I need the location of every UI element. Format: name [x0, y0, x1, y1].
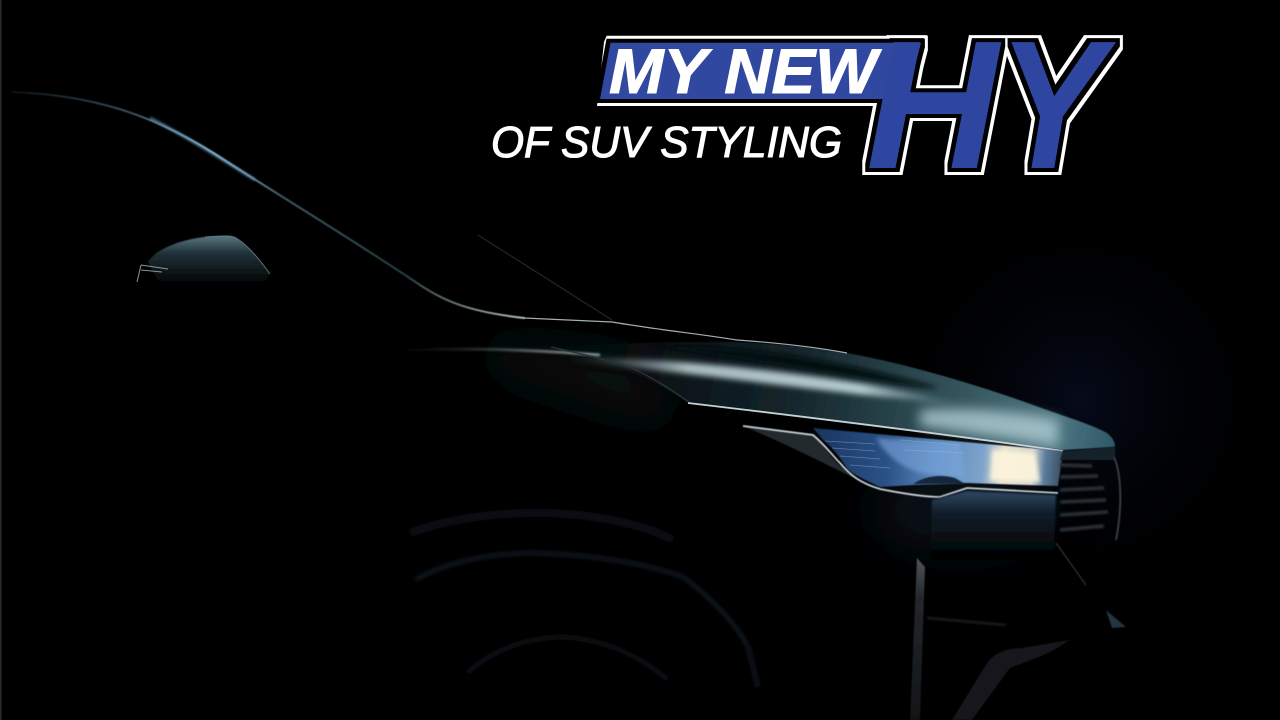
background glow: [880, 200, 1280, 600]
lamp lens: [813, 428, 1063, 487]
wheel arch lower arc: [415, 553, 758, 687]
grille slats: [1060, 465, 1108, 530]
wiper line: [478, 235, 612, 320]
hood front glare: [920, 409, 1058, 446]
grille: [1056, 457, 1120, 585]
car silhouette: [12, 92, 1126, 720]
lamp dark lens curve: [913, 476, 965, 484]
soft roof highlight: [150, 118, 255, 180]
lit area beneath headlight: [870, 465, 1050, 555]
hood surface: [555, 342, 1115, 450]
lower bumper intake: [952, 640, 1069, 720]
body crease highlight: [392, 349, 600, 355]
hood top dark band: [640, 345, 940, 388]
lamp side panel: [743, 426, 855, 478]
grille right frame: [1114, 457, 1120, 540]
lamp chrome sweep: [743, 426, 1058, 497]
logo letter Y: Y: [998, 4, 1117, 207]
left edge strip: [0, 0, 2, 720]
hood edge line: [524, 318, 847, 353]
grille lower edge: [1056, 543, 1086, 585]
logo: My New HY of SUV styling: [491, 2, 1117, 207]
fender shadow edge: [1060, 447, 1115, 460]
lamp scanlines: [825, 440, 965, 468]
car body shading: [470, 343, 690, 420]
mirror housing: [148, 236, 270, 288]
logo letter H: H: [866, 2, 1002, 207]
lamp upper trim: [688, 403, 1063, 451]
logo words MY NEW: MY NEW: [609, 37, 882, 107]
bumper corner highlight: [1106, 610, 1126, 628]
mirror indicator edge: [137, 265, 168, 282]
logo outlined shape: [600, 2, 1117, 207]
lamp inner light patch: [876, 438, 965, 478]
mirror rim light: [205, 236, 270, 274]
wheel arch upper arc: [410, 513, 673, 540]
mask: open left end of banner: [580, 30, 609, 106]
front bumper panel: [930, 491, 1056, 560]
lamp hot spot: [990, 450, 1040, 482]
hood highlight band: [570, 357, 965, 405]
side mirror: [137, 236, 270, 288]
vertical fog lamp bar: [910, 558, 925, 720]
headlight: [743, 426, 1063, 497]
logo tagline: OF SUV STYLING: [491, 118, 842, 167]
logo banner: [600, 43, 930, 99]
roof and windscreen line: [12, 92, 524, 318]
tyre arc: [467, 637, 668, 680]
lower bumper lip: [927, 618, 1006, 625]
body crease line: [551, 347, 690, 403]
